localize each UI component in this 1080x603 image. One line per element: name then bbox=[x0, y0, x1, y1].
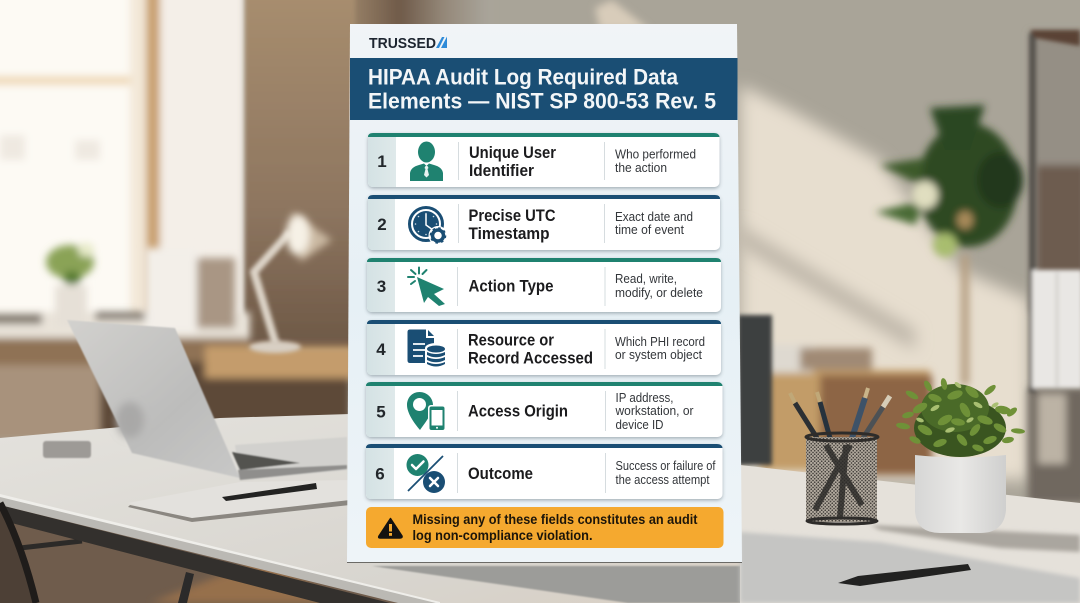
row description: Success or failure of bbox=[616, 459, 716, 473]
row description: the access attempt bbox=[616, 473, 710, 487]
notebook and pen bbox=[128, 480, 350, 522]
number 1: 1 bbox=[377, 152, 387, 171]
number 5: 5 bbox=[376, 402, 386, 422]
row 3: action type bbox=[367, 258, 721, 312]
row 1: unique user identifier bbox=[368, 133, 720, 187]
shadow under poster bbox=[372, 566, 741, 603]
row description: or system object bbox=[615, 348, 702, 362]
row title: Precise UTC bbox=[468, 207, 556, 225]
row description: Who performed bbox=[615, 148, 696, 162]
poster sheet bbox=[347, 24, 742, 562]
row 2: precise UTC timestamp bbox=[368, 195, 720, 250]
warning text bbox=[412, 511, 698, 543]
logo: TRUSSED AI: TRUSSED bbox=[369, 35, 436, 52]
row title bbox=[468, 332, 593, 368]
row 6: outcome bbox=[366, 444, 722, 499]
callout: warning banner bbox=[366, 507, 724, 548]
row description: device ID bbox=[616, 418, 664, 432]
right wall with sunlight bbox=[738, 85, 1030, 480]
icon: clock with gear bbox=[410, 208, 448, 245]
right desk bbox=[740, 465, 1080, 603]
background potted tree bbox=[875, 105, 1023, 385]
row description bbox=[615, 391, 694, 432]
icon: cursor click bbox=[408, 268, 445, 306]
row title: Resource or bbox=[468, 332, 555, 350]
row title: Action Type bbox=[468, 278, 554, 296]
row title bbox=[468, 207, 556, 243]
warning text: log non-compliance violation. bbox=[412, 527, 592, 543]
row description: Read, write, bbox=[615, 272, 677, 286]
desk lamp bbox=[249, 212, 332, 353]
warning text: Missing any of these fields constitutes an audit bbox=[412, 511, 698, 527]
background plant on sill bbox=[46, 243, 94, 327]
shelf at far right bbox=[1028, 30, 1080, 503]
number 6: 6 bbox=[375, 464, 385, 484]
row description: time of event bbox=[615, 223, 684, 237]
icon: document with database bbox=[408, 330, 447, 367]
row title: Unique User bbox=[469, 144, 557, 162]
row description bbox=[615, 272, 703, 300]
row description: modify, or delete bbox=[615, 286, 703, 300]
desk surface and front edge bbox=[0, 414, 740, 603]
row title: Timestamp bbox=[468, 225, 550, 243]
wood cabinet and chair at right bbox=[738, 315, 932, 475]
icon: warning triangle bbox=[379, 518, 402, 538]
header band with title: Elements — NIST SP 800-53 Rev. 5 bbox=[368, 88, 716, 114]
row description: workstation, or bbox=[615, 404, 694, 418]
icon: person bbox=[410, 142, 443, 181]
row description bbox=[615, 148, 696, 175]
row title: Record Accessed bbox=[468, 350, 593, 368]
row description: the action bbox=[615, 161, 667, 175]
window and pale wall bbox=[0, 0, 245, 330]
number 2: 2 bbox=[377, 215, 387, 234]
row description: Which PHI record bbox=[615, 335, 705, 349]
row title: Outcome bbox=[468, 465, 533, 483]
row title: Access Origin bbox=[468, 402, 568, 420]
small puck on desk bbox=[43, 441, 91, 458]
green plant leaves bbox=[896, 378, 1025, 457]
icon: location pin and phone bbox=[407, 392, 446, 432]
header band with title: HIPAA Audit Log Required Data bbox=[368, 64, 679, 90]
laptop bbox=[67, 320, 347, 480]
number 4: 4 bbox=[376, 340, 386, 359]
pen on right desk bbox=[838, 564, 971, 586]
number 3: 3 bbox=[377, 277, 386, 296]
row description: IP address, bbox=[616, 391, 674, 405]
row description bbox=[615, 335, 705, 362]
icon: check and cross bbox=[406, 454, 445, 493]
window sill and radiator bbox=[0, 248, 355, 442]
poster panel bbox=[347, 24, 742, 562]
pencil holder bbox=[790, 388, 890, 524]
wall above poster bbox=[340, 0, 650, 40]
row description bbox=[615, 210, 693, 237]
row title: Identifier bbox=[469, 162, 535, 180]
header band with title bbox=[350, 58, 738, 120]
row 4: resource or record accessed bbox=[367, 320, 721, 375]
wood wall bbox=[245, 0, 355, 350]
row description: Exact date and bbox=[615, 210, 693, 224]
white plant pot bbox=[915, 455, 1006, 533]
row description bbox=[616, 459, 716, 487]
row 5: access origin bbox=[366, 382, 722, 437]
row title bbox=[469, 144, 557, 180]
